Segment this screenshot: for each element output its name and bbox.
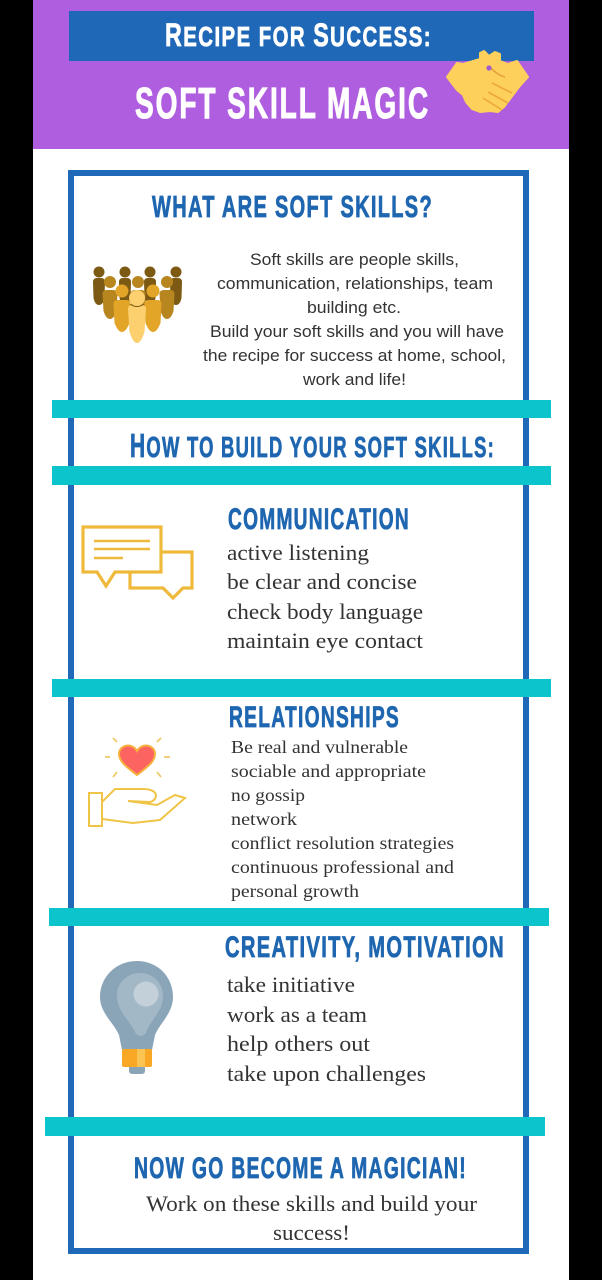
section: creativity, motivation: work as a team (227, 1002, 367, 1027)
section: communication: active listening (227, 540, 369, 565)
panel frame (71, 173, 526, 1251)
text block: soft skills definition: Build your soft skills and you will have (210, 323, 504, 341)
section: relationships: continuous professional and (231, 857, 454, 877)
text block: soft skills definition: communication, relationships, team (217, 275, 493, 293)
section: relationships (229, 701, 454, 901)
section: creativity, motivation (225, 931, 505, 1086)
divider bar 2 (52, 466, 551, 485)
divider bar 1 (52, 400, 551, 418)
section: relationships: conflict resolution strategies (231, 833, 454, 853)
section: creativity, motivation: take upon challenges (227, 1061, 426, 1086)
section: communication (227, 503, 423, 653)
title: recipe for success: RECIPE FOR SUCCESS: (165, 17, 432, 53)
icon: hand with heart (89, 738, 185, 826)
text block: soft skills definition (203, 251, 506, 389)
divider bar 4 (49, 908, 549, 926)
section: relationships: no gossip (231, 785, 305, 805)
section: relationships: network (231, 809, 297, 829)
icon: light bulb (100, 961, 173, 1074)
section: relationships: sociable and appropriate (231, 761, 426, 781)
text block: closing message (146, 1191, 478, 1245)
icon: group of people (93, 266, 182, 343)
section: relationships: Be real and vulnerable (231, 737, 408, 757)
section: creativity, motivation: take initiative (227, 972, 355, 997)
divider bar 5 (45, 1117, 545, 1136)
section: relationships: personal growth (231, 881, 359, 901)
icon: speech bubbles (83, 527, 192, 598)
section: communication: COMMUNICATION (228, 503, 410, 536)
icon: handshake (447, 51, 528, 112)
section: communication: check body language (227, 599, 423, 624)
header band (33, 0, 569, 149)
heading: what are soft skills: WHAT ARE SOFT SKILLS? (152, 189, 433, 224)
text block: soft skills definition: building etc. (307, 299, 401, 317)
section: relationships: RELATIONSHIPS (229, 701, 400, 734)
text block: closing message: Work on these skills and build your (146, 1191, 478, 1216)
section: communication: be clear and concise (227, 569, 417, 594)
text block: closing message: success! (273, 1220, 350, 1245)
text block: soft skills definition: work and life! (302, 371, 406, 389)
divider bar 3 (52, 679, 551, 697)
section: communication: maintain eye contact (227, 628, 423, 653)
text block: soft skills definition: Soft skills are people skills, (250, 251, 459, 269)
text block: soft skills definition: the recipe for success at home, school, (203, 347, 506, 365)
section: creativity, motivation: help others out (227, 1031, 370, 1056)
title: soft skill magic: SOFT SKILL MAGIC (135, 79, 430, 128)
